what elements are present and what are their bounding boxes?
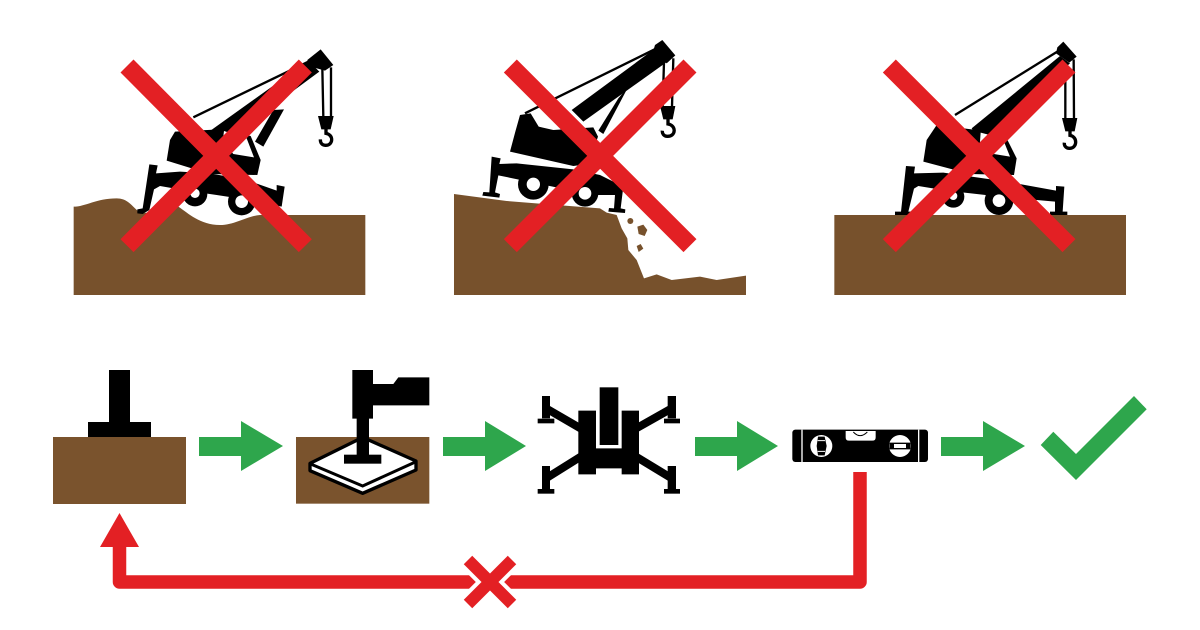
- ground: collapsing slope: [454, 194, 746, 295]
- ground: uneven soil: [74, 198, 365, 295]
- arrow: step 1 to 2: [199, 421, 283, 471]
- crane: on flat ground: [895, 42, 1077, 215]
- step 3: outriggers fully extended: [538, 387, 680, 494]
- red x on return line: [468, 560, 512, 604]
- arrow: step 4 to check: [941, 421, 1025, 471]
- icon: green check mark: [1041, 396, 1147, 480]
- red cross: [889, 66, 1069, 246]
- ground: flat soil: [834, 215, 1126, 295]
- step 2: cribbing under outrigger: [296, 370, 429, 504]
- step 4: spirit level: [792, 430, 928, 462]
- step 1: outrigger pad on ground: [53, 370, 186, 504]
- panel: crane on flat ground with short outriggers: [834, 42, 1126, 295]
- crane: sliding over edge: [482, 40, 675, 213]
- red return arrow: not level, go back: [100, 472, 860, 582]
- arrow: step 3 to 4: [695, 421, 778, 471]
- debris: falling soil: [627, 218, 647, 252]
- crane: tilted on uneven ground: [137, 49, 334, 215]
- red cross: [127, 66, 305, 246]
- red cross: [510, 66, 690, 246]
- panel: crane on uneven ground: [74, 49, 365, 295]
- arrow: step 2 to 3: [443, 421, 526, 471]
- panel: crane on collapsing edge: [454, 40, 746, 295]
